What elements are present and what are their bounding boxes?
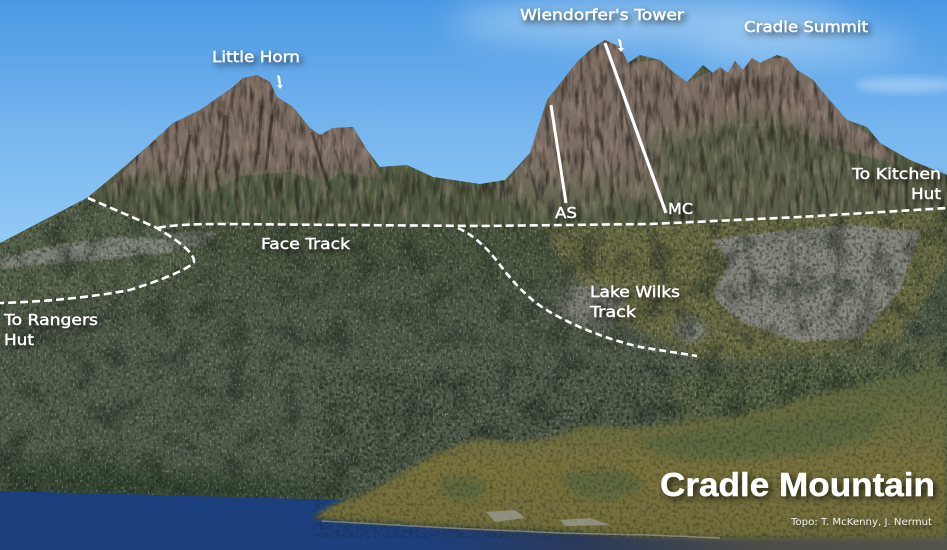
grey patches bbox=[556, 285, 624, 325]
label: AS: AS bbox=[555, 204, 577, 222]
route line: MC bbox=[605, 43, 666, 213]
label: To Rangers Hut: To Rangers bbox=[3, 311, 98, 329]
dark cliff fissures bbox=[745, 235, 880, 330]
left grassy shoulder bbox=[0, 198, 194, 303]
icon: Little Horn arrow bbox=[277, 75, 283, 89]
label: Lake Wilks Track bbox=[589, 283, 680, 321]
rock band right of track bbox=[160, 232, 215, 248]
label: To Rangers Hut bbox=[3, 311, 98, 349]
label: To Kitchen Hut bbox=[851, 165, 941, 203]
label: To Kitchen Hut: Hut bbox=[911, 185, 941, 203]
forest slope bbox=[0, 190, 947, 550]
credit: Topo: T. McKenny, J. Nermut bbox=[790, 517, 932, 528]
left rock band bbox=[0, 237, 178, 268]
label: Cradle Summit: Cradle Summit bbox=[744, 18, 868, 36]
right green slope bbox=[674, 344, 936, 416]
icon: Wiendorfer's Tower arrow bbox=[618, 39, 624, 52]
dark lower band bbox=[0, 460, 340, 500]
grey cliff bbox=[712, 224, 920, 342]
dashed track: To Rangers Hut bbox=[0, 198, 194, 303]
Little Horn base vegetation bbox=[93, 175, 334, 200]
label: To Rangers Hut: Hut bbox=[4, 331, 34, 349]
title: Cradle Mountain bbox=[660, 466, 935, 503]
Little Horn rock bbox=[108, 75, 380, 193]
label: Little Horn: Little Horn bbox=[212, 48, 300, 66]
dashed track: Face Track bbox=[158, 208, 947, 228]
foreground hill bbox=[313, 365, 947, 538]
label: Lake Wilks Track: Lake Wilks bbox=[590, 283, 680, 301]
mountain massif bbox=[0, 30, 947, 230]
Cradle rock bbox=[495, 40, 900, 215]
label: MC: MC bbox=[668, 200, 693, 218]
label: To Kitchen Hut: To Kitchen bbox=[851, 165, 941, 183]
label: Lake Wilks Track: Track bbox=[589, 303, 636, 321]
label: Face Track: Face Track bbox=[261, 235, 350, 253]
horn cracks bbox=[182, 105, 328, 186]
route line: AS bbox=[551, 105, 566, 203]
olive band right of centre bbox=[540, 208, 947, 360]
dashed track: Lake Wilks Track bbox=[458, 228, 697, 356]
label: Wiendorfer's Tower: Wiendorfer's Tower bbox=[520, 6, 685, 24]
sky background bbox=[0, 0, 947, 260]
green slope on right of Cradle bbox=[648, 108, 882, 184]
lake bbox=[0, 491, 947, 550]
saddle vegetation bbox=[372, 170, 479, 184]
